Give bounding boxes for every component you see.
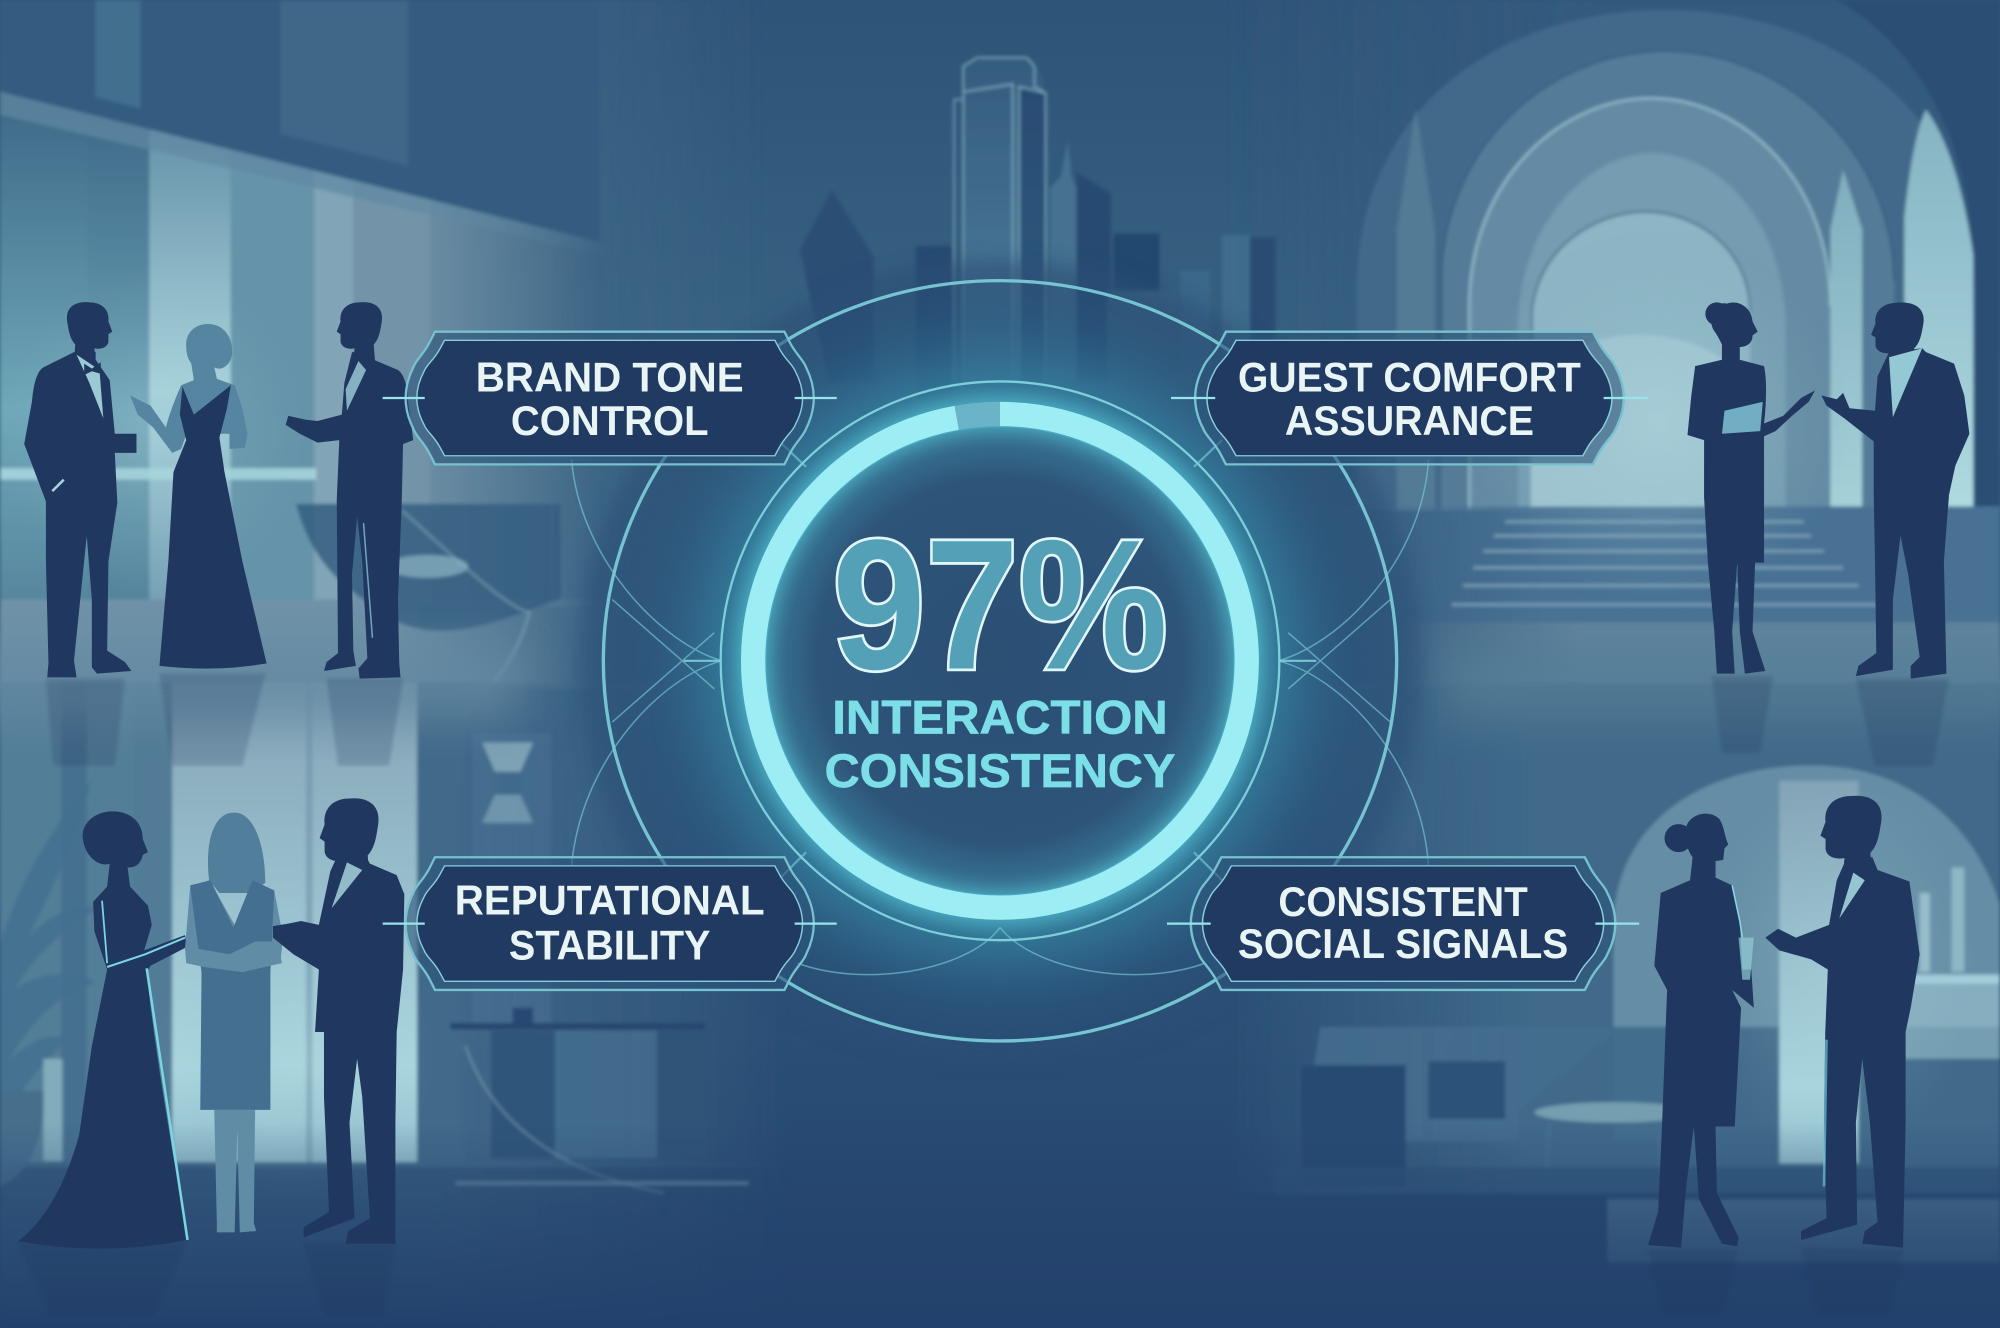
figure: woman in dress with glass <box>1648 814 1754 1248</box>
headline: 97%: 97% <box>832 502 1168 708</box>
label: consistent social signals: SOCIAL SIGNALS <box>1238 921 1568 968</box>
subheading: interaction consistency: CONSISTENCY <box>825 745 1175 798</box>
people group: bottom right <box>1648 796 1920 1248</box>
label: reputational stability: STABILITY <box>509 921 710 968</box>
background: city skyline <box>800 57 1276 406</box>
figure: woman in gown, backlit <box>130 324 267 669</box>
centre disc dimming the scene <box>579 259 1421 1063</box>
figure reflections on floor <box>18 674 1949 1314</box>
people group: top right <box>1688 302 1969 679</box>
label: brand tone control <box>383 332 837 464</box>
figure: man in suit gesturing <box>1765 796 1920 1248</box>
figure: man in suit <box>273 798 404 1244</box>
centre glow halo <box>611 272 1389 1050</box>
figure: woman in long gown <box>18 811 187 1249</box>
figure: man in tuxedo gesturing <box>1821 303 1969 679</box>
label: consistent social signals <box>1167 857 1639 990</box>
figure: woman with tablet <box>1688 302 1815 674</box>
label: brand tone control: CONTROL <box>511 397 709 444</box>
background: arched gallery top right <box>1224 0 2000 689</box>
progress ring: 97 percent <box>721 381 1279 940</box>
label: guest comfort assurance <box>1171 332 1648 464</box>
label: guest comfort assurance: GUEST COMFORT <box>1238 355 1581 401</box>
label: brand tone control: BRAND TONE <box>476 354 744 401</box>
people group: bottom left <box>18 798 404 1249</box>
label: reputational stability: REPUTATIONAL <box>455 877 765 924</box>
label: guest comfort assurance: ASSURANCE <box>1285 398 1534 445</box>
label: reputational stability <box>383 857 837 990</box>
figure: woman in dress, backlit <box>185 813 283 1232</box>
subheading: interaction consistency <box>825 692 1175 798</box>
connecting arc network <box>571 281 1429 1041</box>
background: lounge lower right <box>1224 682 2000 1263</box>
background: lounge lower left <box>0 682 791 1328</box>
floor fade <box>0 1123 2000 1328</box>
figure: man in tuxedo <box>24 302 136 677</box>
subheading: interaction consistency: INTERACTION <box>832 692 1168 745</box>
people group: top left <box>24 302 413 679</box>
background: modern glass lobby top left <box>0 0 765 791</box>
label: consistent social signals: CONSISTENT <box>1278 879 1528 926</box>
background: mid-height floor haze <box>0 644 2000 721</box>
figure: man gesturing <box>286 302 413 679</box>
background: ambient light glows <box>0 230 1977 1199</box>
